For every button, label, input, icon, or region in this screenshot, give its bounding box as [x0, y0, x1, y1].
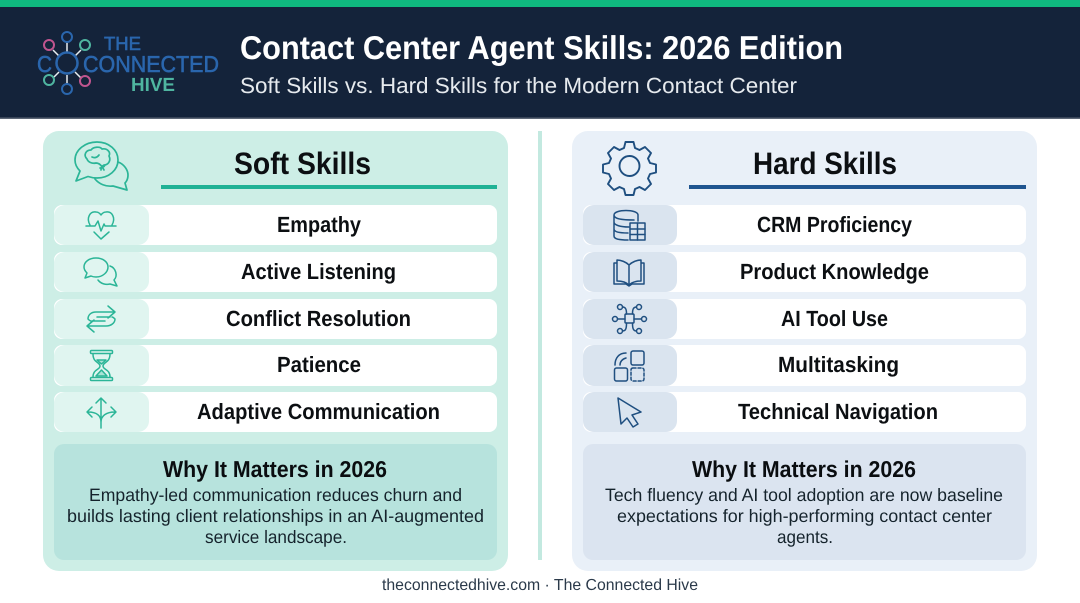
logo: The Connected Hive [37, 32, 219, 96]
center divider [538, 131, 542, 560]
callout: why it matters soft [54, 444, 497, 560]
skill row: ai tool use [583, 299, 1026, 339]
logo: The Connected Hive: HIVE [131, 75, 175, 96]
skill row: conflict resolution [54, 299, 497, 339]
panel: soft skills [43, 131, 508, 571]
callout: why it matters soft: service landscape. [205, 527, 347, 547]
icon: cursor arrow [618, 398, 641, 427]
skill row: ai tool use: AI Tool Use [781, 306, 888, 331]
logo: The Connected Hive: C [37, 51, 52, 77]
skill row: active listening [54, 252, 497, 292]
skill row: multitasking: Multitasking [778, 352, 899, 377]
logo: The Connected Hive: THE [104, 34, 141, 55]
icon: heartbeat [86, 212, 116, 239]
panel: hard skills [572, 131, 1037, 571]
skill row: adaptive communication [54, 392, 497, 432]
logo: The Connected Hive: CONNECTED [83, 51, 219, 77]
icon: ai chip network [612, 304, 646, 334]
icon: swap arrows [87, 306, 115, 332]
icon: speech bubbles [84, 258, 117, 286]
skill row: conflict resolution: Conflict Resolution [226, 306, 411, 331]
title: Contact Center Agent Skills: 2026 Edition [240, 29, 843, 66]
callout: why it matters hard: agents. [777, 527, 833, 547]
callout: why it matters hard: Tech fluency and AI tool adoption are now baseline [605, 485, 1003, 505]
skill row: patience [54, 345, 497, 386]
heading underline [161, 185, 497, 189]
skill row: patience: Patience [277, 352, 361, 377]
skill row: adaptive communication: Adaptive Communication [197, 399, 440, 424]
heading: soft skills: Soft Skills [234, 146, 371, 181]
callout: why it matters hard: expectations for high-performing contact center [617, 506, 992, 526]
callout: why it matters soft: builds lasting client relationships in an AI-augmented [67, 506, 484, 526]
icon: open book [614, 260, 644, 286]
skill row: crm proficiency [583, 205, 1026, 245]
heading underline [689, 185, 1026, 189]
icon: branching arrows [87, 398, 116, 428]
icon: gear [603, 142, 656, 195]
icon: task squares [614, 351, 644, 381]
skill row: technical navigation: Technical Navigation [738, 399, 938, 424]
callout: why it matters soft: Empathy-led communication reduces churn and [89, 485, 462, 505]
skill row: crm proficiency: CRM Proficiency [757, 212, 913, 237]
callout: why it matters hard: Why It Matters in 2026 [692, 456, 916, 482]
heading: hard skills: Hard Skills [753, 146, 897, 181]
callout: why it matters hard [583, 444, 1026, 560]
skill row: empathy: Empathy [277, 212, 362, 237]
icon: brain speech bubbles [75, 142, 128, 190]
subtitle: Soft Skills vs. Hard Skills for the Modern Contact Center [240, 73, 797, 98]
skill row: active listening: Active Listening [241, 259, 396, 284]
skill row: multitasking [583, 345, 1026, 386]
skill row: product knowledge: Product Knowledge [740, 259, 929, 284]
header band [0, 0, 1080, 119]
skill row: technical navigation [583, 392, 1026, 432]
skill row: product knowledge [583, 252, 1026, 292]
skill row: empathy [54, 205, 497, 245]
callout: why it matters soft: Why It Matters in 2026 [163, 456, 387, 482]
footer: theconnectedhive.com · The Connected Hive [382, 577, 698, 594]
icon: database table [614, 210, 645, 240]
icon: hourglass [90, 350, 112, 380]
